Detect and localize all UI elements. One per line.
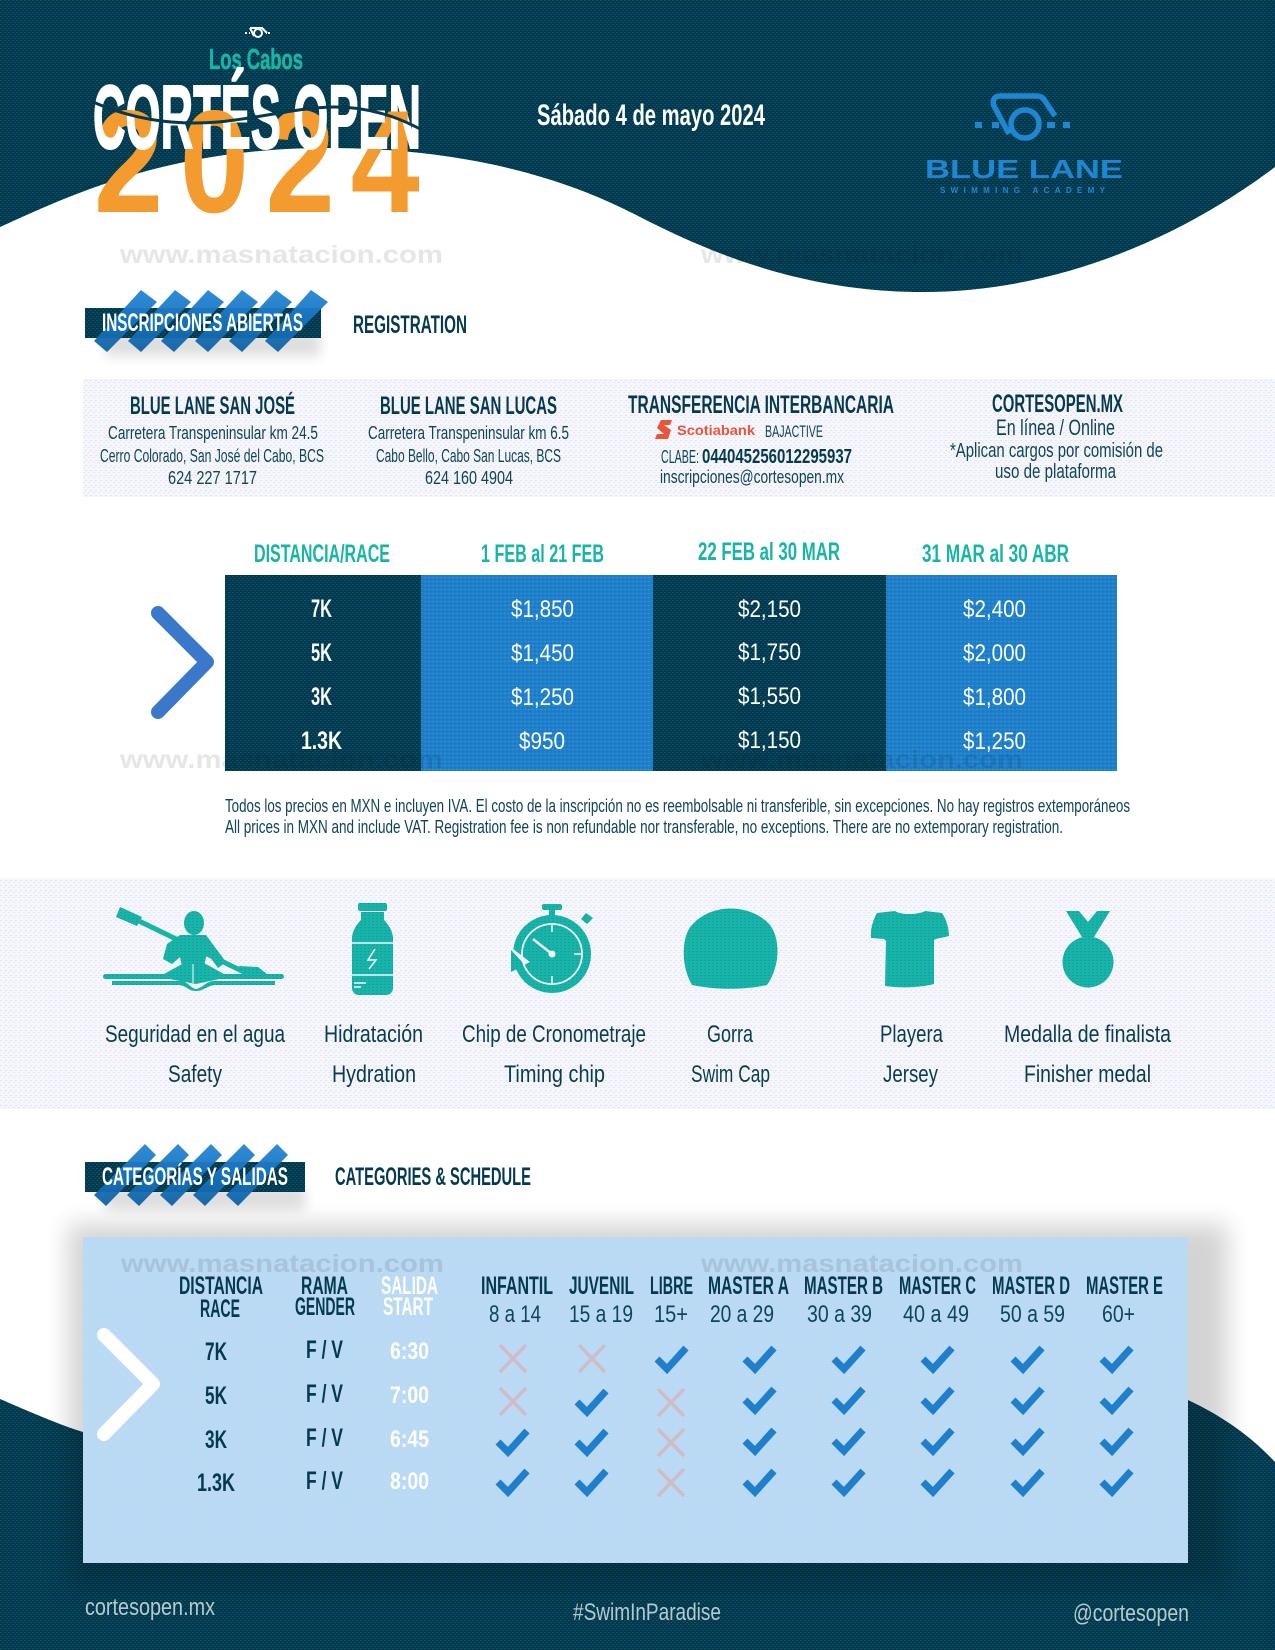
footer: hashtag: #SwimInParadise (573, 1599, 721, 1626)
age ranges: 20 a 29 (710, 1301, 774, 1328)
label: swim cap: Gorra (707, 1021, 753, 1048)
distances (301, 595, 342, 755)
age ranges: 15+ (654, 1301, 688, 1328)
wordmark: BLUE LANE (925, 154, 1123, 184)
label: swim cap: Swim Cap (691, 1061, 770, 1088)
heading stripes (94, 1144, 288, 1206)
heading bar (85, 308, 321, 338)
icon: hydration bottle (352, 903, 393, 995)
prices: 1 FEB al 21 FEB: $1,250 (511, 684, 574, 711)
location: San José: Cerro Colorado, San José del Cabo, BCS (100, 446, 324, 466)
start times: 8:00 (390, 1468, 429, 1495)
payment: online: En línea / Online (996, 415, 1115, 440)
column headers: MASTER E (1086, 1272, 1163, 1300)
panel: included items (0, 878, 1275, 1109)
heading: Categorías y salidas (85, 1144, 305, 1210)
prices: 31 MAR al 30 ABR (963, 596, 1026, 755)
prices: 1 FEB al 21 FEB: $1,850 (511, 596, 574, 623)
label: hydration (324, 1021, 423, 1088)
payment: bank transfer: inscripciones@cortesopen.mx (660, 467, 844, 487)
event date: Sábado 4 de mayo 2024 (537, 99, 765, 132)
icon: stopwatch (508, 904, 593, 993)
column headers: DISTANCIA (179, 1272, 263, 1300)
heading text: INSCRIPCIONES ABIERTAS (102, 309, 303, 337)
start times (390, 1338, 429, 1495)
location: San José: Carretera Transpeninsular km 24.5 (108, 423, 318, 443)
panel background (0, 878, 1275, 1109)
label: timing chip (462, 1021, 646, 1088)
note: pricing terms (225, 796, 1130, 837)
label: hydration: Hydration (332, 1061, 416, 1088)
label: medal: Medalla de finalista (1004, 1021, 1172, 1048)
start times: 7:00 (390, 1382, 429, 1409)
prices: 22 FEB al 30 MAR (738, 596, 801, 754)
checks: eligible (498, 1348, 1131, 1492)
payment: online: uso de plataforma (995, 461, 1117, 483)
title: Cortés Open: CORTÉS OPEN (93, 67, 421, 168)
payment: online: CORTESOPEN.MX (992, 390, 1123, 418)
arrow: white chevron (104, 1335, 153, 1434)
location: San Lucas: Cabo Bello, Cabo San Lucas, BCS (376, 446, 561, 466)
prices: 22 FEB al 30 MAR: $1,150 (738, 727, 801, 754)
prices: 31 MAR al 30 ABR: $1,800 (963, 684, 1026, 711)
distances: 3K (311, 683, 332, 711)
distances: 5K (311, 639, 332, 667)
label: timing chip: Chip de Cronometraje (462, 1021, 646, 1048)
label: medal (1004, 1021, 1172, 1088)
column headers: JUVENIL (569, 1272, 634, 1300)
label: jersey: Jersey (883, 1061, 938, 1088)
column headers: SALIDA (381, 1272, 438, 1300)
column headers: RAMA (301, 1272, 348, 1300)
heading stripes (94, 290, 328, 352)
watermarks: www.masnatacion.com (700, 241, 1023, 269)
gender: F / V (306, 1424, 343, 1452)
watermarks: www.masnatacion.com (700, 746, 1023, 774)
arrow: blue chevron (158, 613, 207, 712)
location: San Lucas: 624 160 4904 (425, 468, 513, 488)
panel shadow (68, 1224, 1228, 1589)
panel background (83, 1237, 1188, 1563)
panel background (83, 379, 1275, 497)
label: hydration: Hidratación (324, 1021, 423, 1048)
column headers: MASTER C (899, 1272, 976, 1300)
table columns (225, 575, 1117, 771)
label: jersey: Playera (880, 1021, 944, 1048)
heading: Registration: REGISTRATION (353, 311, 467, 339)
gender (306, 1336, 343, 1495)
heading shadow (105, 332, 320, 356)
column headers: MASTER A (708, 1272, 789, 1300)
start times: 6:45 (390, 1426, 429, 1453)
heading: Categories and schedule: CATEGORIES & SCHEDULE (335, 1163, 531, 1191)
logo: Blue Lane Swimming Academy (925, 96, 1123, 195)
column headers: LIBRE (650, 1272, 693, 1300)
age ranges: 60+ (1102, 1301, 1135, 1328)
column headers: RACE (200, 1295, 240, 1323)
table headers: 31 MAR al 30 ABR (922, 540, 1069, 568)
prices: 1 FEB al 21 FEB: $950 (519, 728, 565, 755)
location: San Lucas (368, 392, 569, 488)
icon: swim cap (684, 908, 778, 989)
icon: Scotiabank S (655, 420, 672, 439)
payment: bank transfer: TRANSFERENCIA INTERBANCARIA (628, 391, 894, 419)
icon: goggles (993, 96, 1055, 138)
payment: bank transfer: Scotiabank (677, 422, 755, 438)
icon: kayak safety (103, 907, 284, 991)
race distances: 3K (205, 1426, 227, 1454)
label: safety: Safety (168, 1061, 222, 1088)
heading: Inscripciones abiertas (85, 290, 328, 356)
start times: 6:30 (390, 1338, 429, 1365)
label: safety: Seguridad en el agua (105, 1021, 286, 1048)
panel: registration locations (83, 379, 1275, 497)
crosses: not eligible (500, 1345, 684, 1496)
watermarks: www.masnatacion.com (700, 1250, 1023, 1278)
payment: bank transfer (628, 391, 894, 487)
race distances (197, 1338, 235, 1497)
prices: 22 FEB al 30 MAR: $2,150 (738, 596, 801, 623)
age ranges (489, 1301, 1135, 1328)
title year overlap above the wave: 2024 (94, 79, 420, 243)
age ranges: 40 a 49 (903, 1301, 969, 1328)
payment: bank transfer: BAJACTIVE (765, 422, 823, 441)
prices: 1 FEB al 21 FEB (511, 596, 574, 755)
age ranges: 50 a 59 (1000, 1301, 1065, 1328)
label: timing chip: Timing chip (504, 1061, 605, 1088)
gender: F / V (306, 1467, 343, 1495)
footer wave (0, 1399, 1275, 1650)
age ranges: 8 a 14 (489, 1301, 541, 1328)
payment: online: *Aplican cargos por comisión de (950, 440, 1163, 462)
column headers (179, 1272, 1163, 1323)
age ranges: 15 a 19 (569, 1301, 633, 1328)
gender: F / V (306, 1380, 343, 1408)
prices: 1 FEB al 21 FEB: $1,450 (511, 640, 574, 667)
icon: small goggles mark (245, 28, 270, 37)
age ranges: 30 a 39 (807, 1301, 872, 1328)
distances: 1.3K (301, 727, 342, 755)
column headers: INFANTIL (481, 1272, 553, 1300)
footer: social handle: @cortesopen (1073, 1600, 1189, 1627)
table headers: DISTANCIA/RACE (254, 540, 390, 568)
icon: finisher medal (1062, 911, 1114, 988)
tagline: SWIMMING ACADEMY (940, 186, 1106, 195)
heading shadow (105, 1186, 305, 1210)
title year: 2024: 2024 (94, 79, 420, 243)
decorative wave line (93, 102, 422, 130)
watermarks (119, 241, 1023, 1278)
label: medal: Finisher medal (1024, 1061, 1151, 1088)
icon: lane dots (975, 122, 1070, 128)
payment: bank transfer: 044045256012295937 (702, 446, 852, 468)
race distances: 1.3K (197, 1469, 235, 1497)
race distances: 7K (205, 1338, 227, 1366)
gender: F / V (306, 1336, 343, 1364)
race distances: 5K (205, 1382, 227, 1410)
label: swim cap (691, 1021, 770, 1088)
location: San Lucas: Carretera Transpeninsular km 6.5 (368, 423, 569, 443)
icon: jersey (871, 911, 949, 987)
watermarks: www.masnatacion.com (119, 746, 443, 774)
prices: 31 MAR al 30 ABR: $1,250 (963, 728, 1026, 755)
label: safety (105, 1021, 286, 1088)
watermarks: www.masnatacion.com (119, 241, 443, 269)
prices: 22 FEB al 30 MAR: $1,750 (738, 639, 801, 666)
panel: categories and start times (83, 1237, 1188, 1563)
header wave (0, 0, 1275, 292)
table headers: 22 FEB al 30 MAR (698, 538, 840, 566)
column headers: MASTER D (992, 1272, 1070, 1300)
column headers: MASTER B (804, 1272, 883, 1300)
item labels (105, 1021, 1172, 1088)
heading bar (85, 1162, 305, 1192)
table headers (254, 538, 1069, 568)
prices: 31 MAR al 30 ABR: $2,000 (963, 640, 1026, 667)
event logo: Los Cabos Cortés Open 2024 (94, 27, 422, 214)
payment: bank transfer: CLABE: (661, 447, 699, 467)
column headers: GENDER (295, 1293, 355, 1321)
prices: 31 MAR al 30 ABR: $2,400 (963, 596, 1026, 623)
heading text: CATEGORÍAS Y SALIDAS (102, 1162, 288, 1191)
subtitle: Los Cabos: Los Cabos (209, 44, 303, 76)
label: jersey (880, 1021, 944, 1088)
payment: online (950, 390, 1163, 483)
distances: 7K (311, 595, 332, 623)
location: San José: 624 227 1717 (168, 468, 257, 488)
table headers: 1 FEB al 21 FEB (481, 540, 604, 568)
column headers: START (383, 1293, 433, 1321)
footer: website: cortesopen.mx (85, 1594, 215, 1621)
location: San Lucas: BLUE LANE SAN LUCAS (380, 392, 557, 420)
location: San José: BLUE LANE SAN JOSÉ (130, 391, 295, 420)
watermarks: www.masnatacion.com (120, 1250, 444, 1278)
location: San José (100, 391, 324, 488)
table: registration prices (225, 538, 1117, 771)
prices: 22 FEB al 30 MAR: $1,550 (738, 683, 801, 710)
